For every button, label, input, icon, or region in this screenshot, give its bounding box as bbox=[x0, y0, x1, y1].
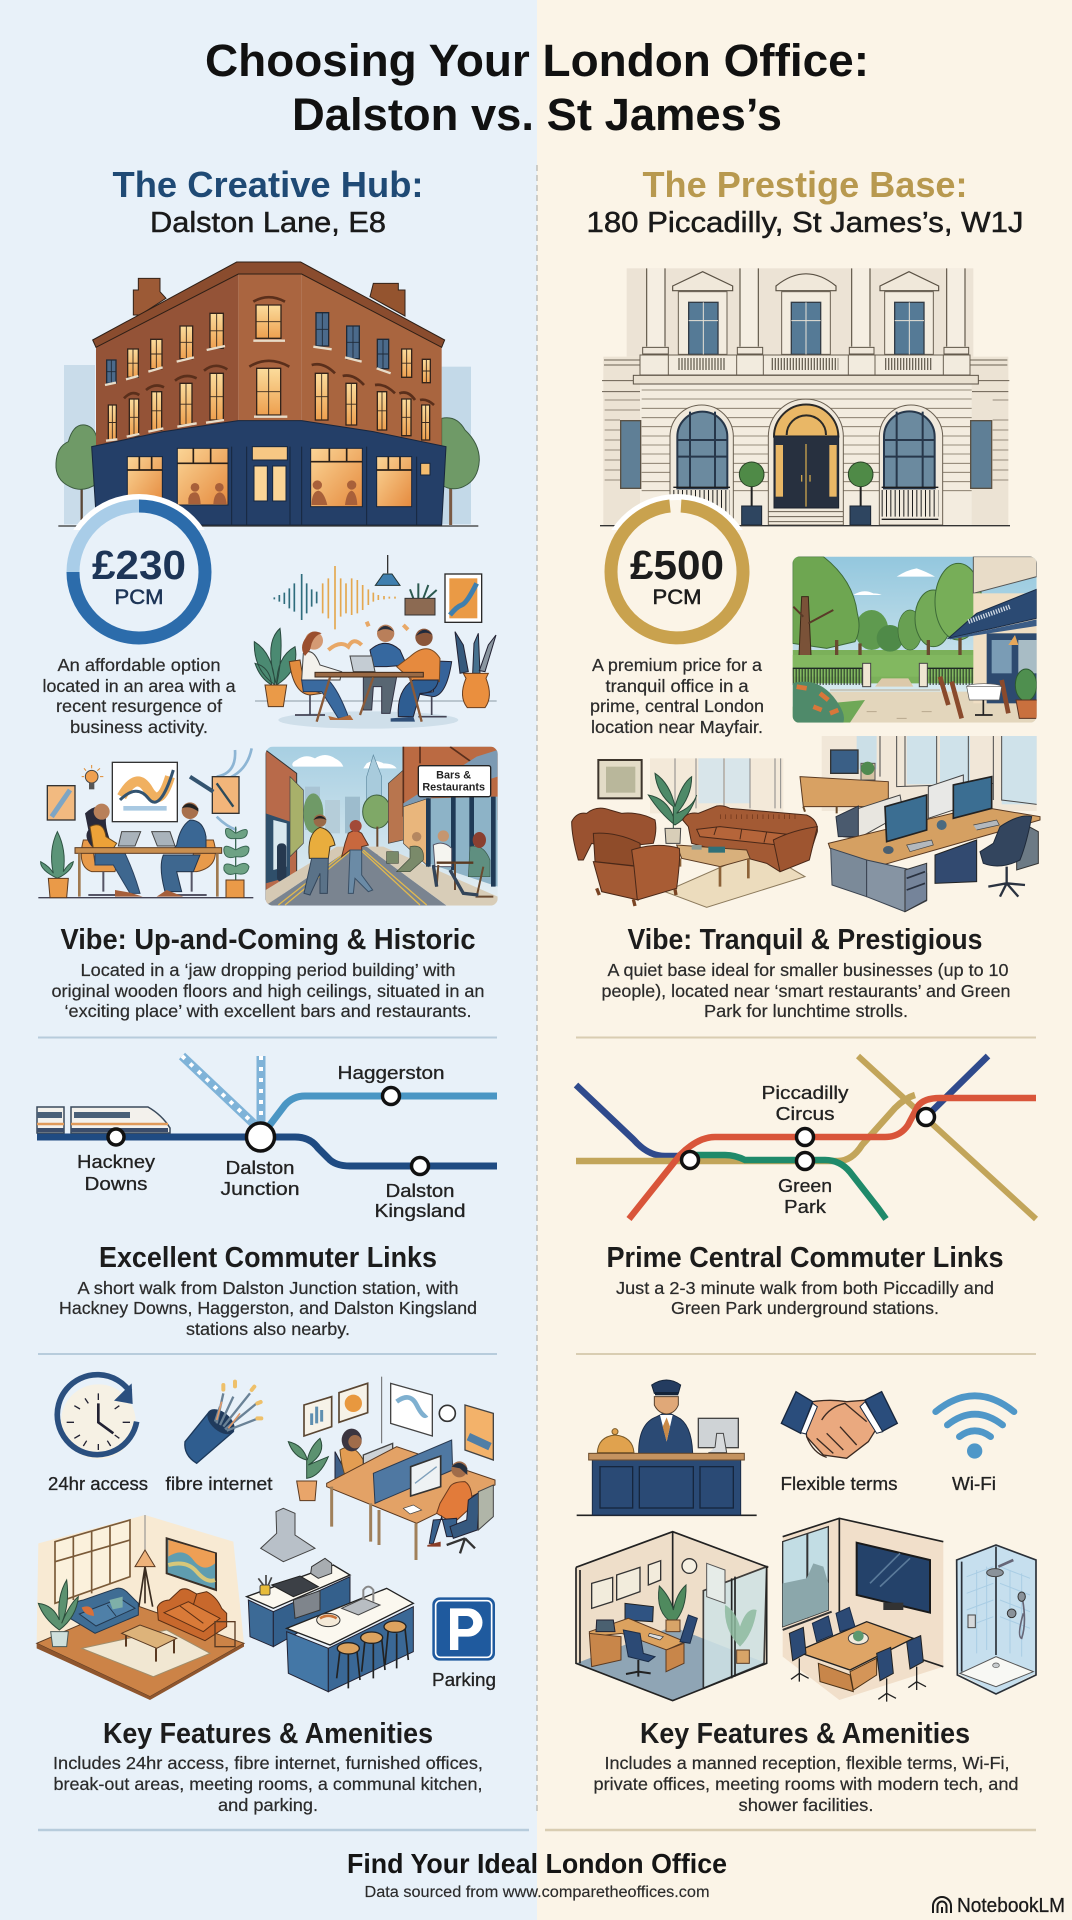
text: commuter links right: Prime Central Commuter Links bbox=[606, 1242, 1004, 1274]
icon: fibre cable bbox=[185, 1382, 261, 1463]
text: features left bbox=[53, 1718, 483, 1815]
station labels bbox=[77, 1062, 466, 1221]
text: vibe right: people), located near ‘smart restaurants’ and Green bbox=[602, 981, 1010, 1001]
illustration: lounge and open-plan desks bbox=[572, 736, 1040, 912]
footer bbox=[347, 1848, 727, 1901]
sofa bbox=[683, 806, 817, 872]
illustration: pair at laptops with chart bbox=[38, 748, 253, 898]
NotebookLM badge: NotebookLM bbox=[957, 1895, 1065, 1917]
station markers bbox=[682, 1108, 934, 1170]
text: commuter links right bbox=[606, 1242, 1004, 1318]
heading: prestige base: 180 Piccadilly, St James’s, W1J bbox=[586, 207, 1024, 239]
text: commuter links left: stations also nearby. bbox=[186, 1319, 350, 1339]
price ring: £230: PCM bbox=[114, 586, 164, 609]
heading: prestige base: The Prestige Base: bbox=[642, 164, 968, 205]
heading: prestige base bbox=[586, 164, 1024, 239]
train bbox=[37, 1107, 170, 1133]
illustration: creative team at table bbox=[254, 555, 497, 729]
icon: parking sign bbox=[432, 1597, 495, 1661]
labels: amenities left: 24hr access bbox=[48, 1473, 148, 1494]
illustration: St James's stone facade bbox=[600, 268, 1010, 526]
text: features right bbox=[594, 1718, 1018, 1815]
text: vibe right: Park for lunchtime strolls. bbox=[704, 1001, 908, 1021]
icon: lounge bbox=[37, 1515, 244, 1700]
footer: Find Your Ideal London Office bbox=[347, 1848, 727, 1879]
price ring: £500: £500 bbox=[630, 542, 724, 588]
text: price description left: An affordable option bbox=[58, 655, 220, 675]
text: features left: Includes 24hr access, fibre internet, furnished offices, bbox=[53, 1753, 483, 1773]
text: price description left: recent resurgence of bbox=[56, 696, 222, 716]
station labels: Junction bbox=[220, 1178, 300, 1199]
illustration: street with bars and restaurants: Restaurants bbox=[422, 782, 485, 794]
text: price description right: A premium price for a bbox=[592, 655, 762, 675]
illustration: Dalston brick building bbox=[56, 262, 479, 526]
text: features left: Key Features & Amenities bbox=[103, 1718, 433, 1750]
labels: amenities right: Flexible terms bbox=[780, 1473, 898, 1494]
station labels: Dalston bbox=[386, 1180, 454, 1201]
price ring: £500 bbox=[604, 494, 750, 644]
text: vibe right bbox=[602, 924, 1010, 1021]
station labels: Park bbox=[784, 1196, 827, 1217]
text: features right: private offices, meeting rooms with modern tech, and bbox=[594, 1774, 1018, 1794]
text: price description right: tranquil office in a bbox=[606, 676, 749, 696]
labels: amenities right: Wi-Fi bbox=[952, 1473, 996, 1494]
footer: Data sourced from www.comparetheoffices.com bbox=[364, 1884, 710, 1901]
labels: amenities left: Parking bbox=[432, 1669, 496, 1690]
price ring: £230 bbox=[66, 494, 212, 644]
station labels bbox=[762, 1082, 849, 1217]
text: vibe left: original wooden floors and high ceilings, situated in an bbox=[52, 981, 484, 1001]
heading: creative hub: The Creative Hub: bbox=[112, 164, 424, 205]
price ring: £230: £230 bbox=[92, 542, 186, 588]
icon: private office bbox=[576, 1532, 768, 1701]
left background panel bbox=[0, 0, 537, 1920]
text: price description right: location near Mayfair. bbox=[591, 717, 763, 737]
title: Choosing Your London Office: bbox=[205, 35, 869, 86]
station labels: Dalston bbox=[226, 1157, 294, 1178]
icon: shower bbox=[957, 1545, 1036, 1694]
text: vibe left: Vibe: Up-and-Coming & Historic bbox=[60, 924, 476, 956]
text: features left: and parking. bbox=[218, 1795, 318, 1815]
centre dashed divider bbox=[536, 165, 538, 1813]
icon: wi-fi bbox=[936, 1396, 1014, 1459]
icon: person at desk offices bbox=[288, 1377, 495, 1560]
text: vibe left: ‘exciting place’ with excellent bars and restaurants. bbox=[64, 1001, 471, 1021]
text: price description left: business activity. bbox=[70, 717, 208, 737]
armchair front bbox=[593, 833, 680, 900]
text: vibe right: A quiet base ideal for smaller businesses (up to 10 bbox=[608, 960, 1009, 980]
station labels: Kingsland bbox=[374, 1200, 466, 1221]
illustration: street with bars and restaurants: Bars & bbox=[436, 770, 471, 782]
station labels: Downs bbox=[84, 1173, 148, 1194]
station labels: Piccadilly bbox=[762, 1082, 849, 1103]
labels: amenities left bbox=[48, 1473, 496, 1690]
station labels: Green bbox=[778, 1175, 832, 1196]
right background panel bbox=[537, 0, 1072, 1920]
text: price description right bbox=[590, 655, 764, 737]
price ring: £500: PCM bbox=[652, 586, 702, 609]
sofa blue bbox=[70, 1588, 138, 1633]
text: vibe left bbox=[52, 924, 484, 1021]
text: commuter links right: Green Park underground stations. bbox=[671, 1298, 939, 1318]
text: price description left bbox=[42, 655, 236, 737]
text: commuter links left: Excellent Commuter Links bbox=[99, 1242, 437, 1274]
title: Dalston vs. St James’s bbox=[292, 89, 782, 140]
text: vibe left: Located in a ‘jaw dropping period building’ with bbox=[80, 960, 456, 980]
text: commuter links left bbox=[59, 1242, 477, 1339]
text: features right: shower facilities. bbox=[738, 1795, 874, 1815]
icon: handshake bbox=[781, 1392, 897, 1458]
icon: kitchen bbox=[247, 1508, 413, 1692]
icon: meeting room bbox=[783, 1518, 943, 1702]
amenities right bbox=[576, 1380, 1036, 1702]
icon: reception desk bbox=[577, 1380, 757, 1515]
icon: 24hr clock bbox=[57, 1375, 137, 1459]
station labels: Haggerston bbox=[338, 1062, 444, 1083]
text: features right: Key Features & Amenities bbox=[640, 1718, 970, 1750]
title bbox=[205, 35, 869, 140]
text: features left: break-out areas, meeting rooms, a communal kitchen, bbox=[54, 1774, 482, 1794]
labels: amenities left: fibre internet bbox=[166, 1473, 272, 1494]
station markers bbox=[108, 1088, 428, 1174]
text: commuter links right: Just a 2-3 minute walk from both Piccadilly and bbox=[616, 1278, 994, 1298]
station labels: Circus bbox=[776, 1103, 834, 1124]
illustration: Green Park and restaurant terrace bbox=[793, 557, 1037, 723]
heading: creative hub: Dalston Lane, E8 bbox=[150, 207, 386, 239]
text: commuter links left: A short walk from Dalston Junction station, with bbox=[78, 1278, 458, 1298]
text: price description left: located in an area with a bbox=[42, 676, 236, 696]
transit map: St James's bbox=[576, 1056, 1036, 1219]
text: features right: Includes a manned reception, flexible terms, Wi-Fi, bbox=[604, 1753, 1010, 1773]
text: commuter links left: Hackney Downs, Haggerston, and Dalston Kingsland bbox=[59, 1298, 477, 1318]
heading: creative hub bbox=[112, 164, 424, 239]
transit map: Dalston bbox=[37, 1056, 497, 1221]
station labels: Hackney bbox=[77, 1151, 156, 1172]
labels: amenities right bbox=[780, 1473, 996, 1494]
armchair back bbox=[572, 808, 656, 860]
amenities left bbox=[37, 1375, 495, 1700]
sofa orange bbox=[157, 1589, 227, 1641]
illustration: street with bars and restaurants bbox=[266, 747, 500, 906]
text: vibe right: Vibe: Tranquil & Prestigious bbox=[628, 924, 982, 956]
text: price description right: prime, central London bbox=[590, 696, 764, 716]
